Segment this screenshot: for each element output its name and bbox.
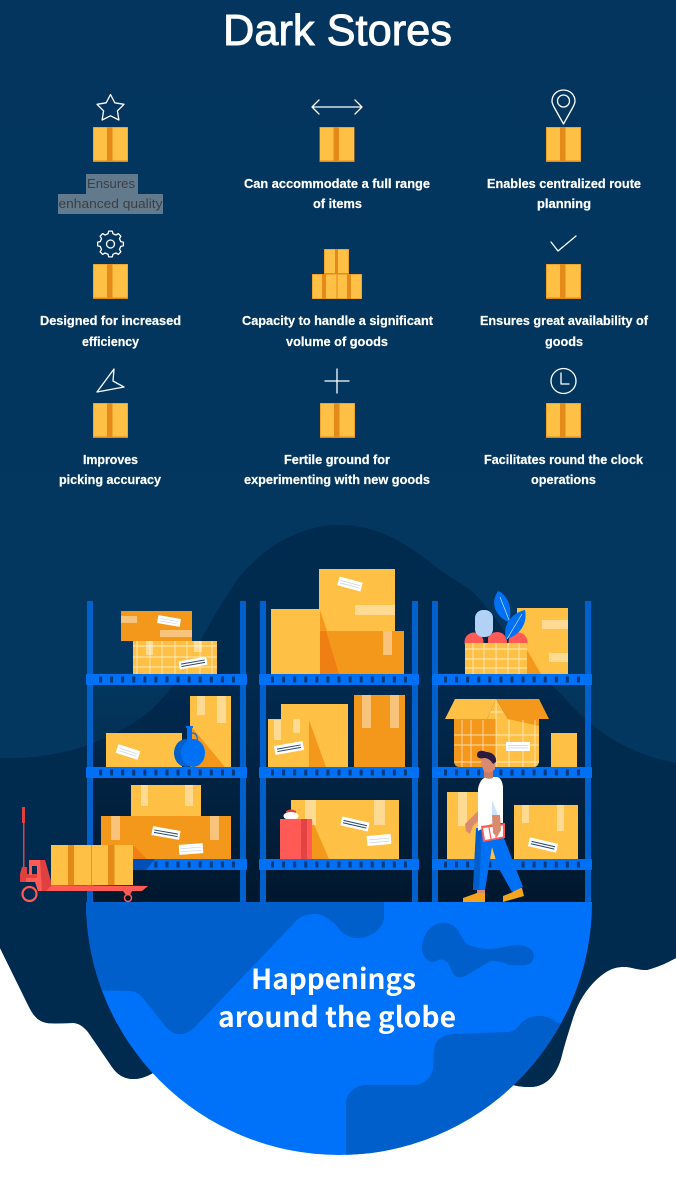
top shelf plant and boxes [464, 591, 568, 674]
bottom shelf boxes [280, 800, 399, 859]
feature: increased efficiency [40, 231, 181, 349]
middle shelf boxes [106, 696, 231, 767]
middle shelf boxes [268, 695, 405, 767]
trousers [473, 828, 523, 892]
title: Dark Stores [223, 6, 452, 55]
feature: new goods [244, 369, 430, 487]
text: goods [545, 334, 583, 349]
bottom shelf boxes [447, 792, 578, 859]
icon: navigation arrow [97, 369, 124, 392]
feature: enhanced quality [58, 94, 163, 214]
text: Facilitates round the clock [484, 452, 644, 467]
shoes [463, 888, 524, 902]
top shelf boxes [121, 611, 217, 674]
feature: picking accuracy [59, 369, 162, 487]
text: experimenting with new goods [244, 472, 430, 487]
text: Improves [83, 452, 138, 467]
arm [465, 811, 480, 834]
globe heading: around the globe [218, 996, 456, 1036]
feature: full range of items [244, 100, 430, 211]
icon: plus [325, 369, 349, 393]
icon: red bag [280, 810, 312, 859]
icon: box [546, 127, 581, 162]
icon: double arrow [312, 100, 362, 114]
text: planning [537, 196, 591, 211]
hand [492, 815, 501, 837]
text: Ensures great availability of [480, 313, 649, 328]
clipboard [481, 823, 505, 842]
middle shelf open box [445, 699, 577, 767]
icon: location pin [552, 90, 575, 124]
bottom shelf boxes [101, 785, 231, 859]
icon: box [546, 264, 581, 299]
text: Enables centralized route [487, 176, 641, 191]
warehouse illustration [20, 569, 620, 1160]
continent: upper left [80, 902, 384, 1034]
text: Can accommodate a full range [244, 176, 430, 191]
text: picking accuracy [59, 472, 162, 487]
feature: significant volume [242, 249, 434, 349]
feature: great availability [480, 236, 649, 349]
text: of items [313, 196, 362, 211]
background: dark hump behind shelves [0, 525, 676, 1087]
text: Fertile ground for [284, 452, 390, 467]
shelf unit 1 [86, 601, 247, 902]
feature: route planning [487, 90, 641, 211]
icon: box [320, 127, 354, 162]
pallet truck with boxes [20, 807, 155, 902]
icon: box [93, 127, 128, 162]
icon: clock [551, 368, 576, 394]
shelf unit 3 [432, 591, 592, 902]
top shelf boxes [271, 569, 404, 674]
globe heading: Happenings [251, 958, 416, 998]
feature: round the clock [484, 368, 644, 487]
icon: blue vase [174, 726, 205, 767]
icon: box [546, 403, 581, 438]
text: operations [531, 472, 596, 487]
text: volume of goods [286, 334, 388, 349]
icon: star [97, 94, 124, 120]
icon: stacked boxes [312, 249, 362, 299]
icon: box [93, 403, 128, 438]
neck and head [484, 770, 493, 779]
icon: gear [98, 231, 123, 257]
icon: box [320, 403, 355, 438]
shirt [478, 777, 503, 831]
text: efficiency [82, 334, 140, 349]
worker with clipboard [463, 751, 524, 902]
text: Capacity to handle a significant [242, 313, 434, 328]
shelf unit 2 [259, 569, 419, 902]
icon: check mark [551, 236, 576, 251]
highlighted text: enhanced quality [58, 196, 163, 211]
icon: box [93, 264, 128, 299]
continent: island [422, 923, 534, 977]
text: Designed for increased [40, 313, 181, 328]
continent: lower right [346, 1016, 561, 1155]
highlighted text: Ensures [87, 176, 135, 191]
ankles [477, 888, 522, 895]
highlighted text [58, 174, 163, 214]
globe [80, 902, 620, 1160]
